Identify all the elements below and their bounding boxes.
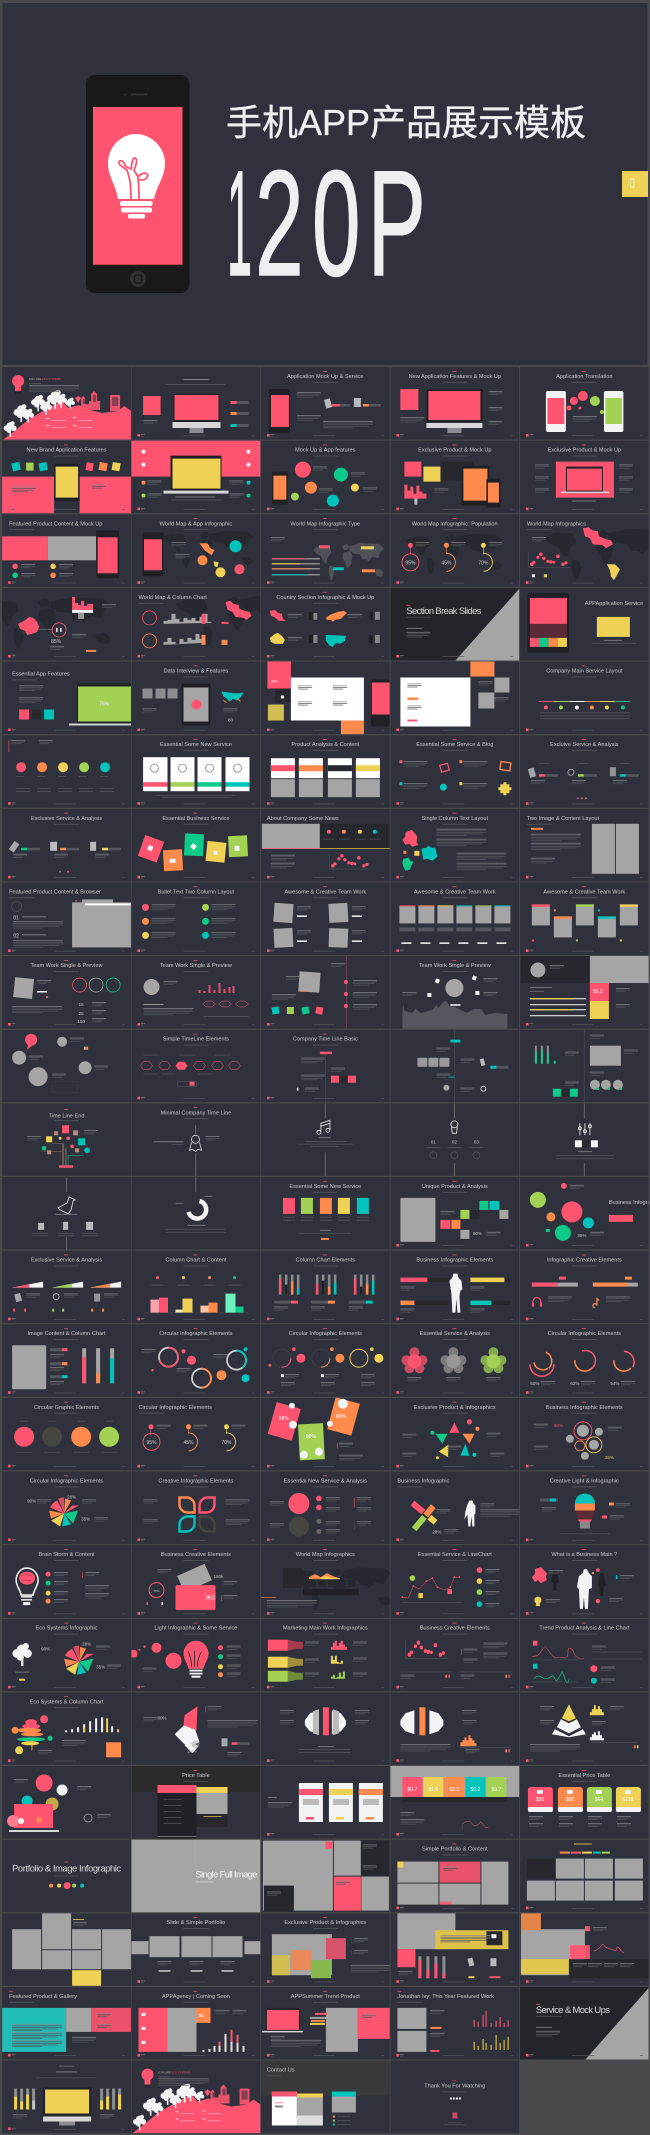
panel: Team Work Profile: 56.2: [593, 989, 603, 995]
panel: Featured Product Content & Browser: 02: [13, 933, 19, 939]
panel: price colored cards: $2.5: [450, 1787, 459, 1793]
panel: World Map & App Infographic: [132, 514, 260, 587]
panel: Creative Light & Infographic: [520, 1472, 649, 1544]
panel: Section Break Slides: [390, 588, 520, 660]
title: Data Interview & Features: [164, 668, 228, 674]
title: Eco Systems & Column Chart: [30, 1699, 104, 1705]
title: Contact Us: [267, 2068, 295, 2074]
panel: Eco Systems Infographic: [2, 1619, 131, 1692]
panel: Business Creative Elements wallet: 150k: [214, 1574, 224, 1579]
title: World Map Infographics: [296, 1552, 355, 1558]
panel: Portfolio & Image Infographic: [2, 1840, 131, 1913]
title: Circular Infographic Elements: [548, 1331, 621, 1337]
panel: APPAgency | Coming Soon: [132, 1987, 260, 2060]
panel: APPSummer Trend Product: [261, 1987, 390, 2060]
title: Simple Portfolio & Content: [422, 1847, 488, 1853]
title: Exclusive Service & Analysis: [31, 1258, 102, 1264]
panel: Business Infographic circles: 35%: [577, 1233, 586, 1238]
panel: Business Creative Elements wallet: [132, 1545, 260, 1618]
silhouette: [464, 1500, 475, 1526]
panel: Column Chart Elements: [261, 1251, 390, 1324]
title: Team Work Single & Preview: [160, 963, 233, 969]
panel: white content sheet: [390, 662, 520, 734]
panel: white shape orange center: [390, 1692, 519, 1765]
panel: APPApplication Service: [520, 588, 649, 660]
panel: fan chart: 20%: [188, 1748, 197, 1753]
title: Slide & Simple Portfolio: [167, 1920, 225, 1926]
panel: World Map Infographic: Population: [390, 514, 520, 587]
panel: World Map Infographics: [520, 514, 649, 587]
panel: Essential Service & Analysis: [390, 1324, 519, 1397]
panel: china map: 85%: [51, 639, 62, 645]
title: Exclusive Product & Mock Up: [418, 448, 491, 454]
title: Business Infographic Elements: [416, 1258, 493, 1264]
panel: Two Image & Content Layout: [520, 809, 649, 882]
panel: Simple Portfolio & Content: [390, 1840, 519, 1913]
panel: Thank You For Watching: [390, 2060, 519, 2134]
title: APPApplication Service: [585, 601, 643, 607]
panel: Slide & Simple Portfolio: [132, 1913, 260, 1986]
title: Time Line End: [49, 1113, 84, 1119]
title: Thank You For Watching: [424, 2084, 485, 2090]
panel: Circular Infographic Elements 4: 95%: [146, 1440, 157, 1446]
heading: 120P: 1: [227, 141, 252, 308]
panel: bulb timeline: 01: [431, 1139, 436, 1144]
panel: price colored cards: $6.2: [471, 1787, 480, 1793]
icon: bulb with brain: [16, 1568, 38, 1605]
grey triangle: [455, 589, 519, 660]
title: New Application Features & Mock Up: [409, 374, 501, 380]
title: Price Table: [182, 1773, 210, 1779]
title: Product Analysis & Content: [291, 742, 360, 748]
panel: Business Infographic Elements rings: 90%: [554, 1423, 563, 1428]
title: Marketing Main Work Infographics: [283, 1626, 368, 1632]
grey triangle: [585, 1988, 649, 2060]
panel: Circular Infographic Elements pie: 28%: [67, 1494, 76, 1500]
panel: Essential Price Table: $56: [536, 1797, 544, 1803]
title: World Map Infographics: [527, 521, 586, 527]
panel: Essential Price Table: $68: [566, 1797, 574, 1803]
panel: timeline chart: [520, 1030, 649, 1103]
panel: Essential Some New Service cards: [261, 1177, 390, 1250]
heading: Section Break Slides: [406, 605, 482, 616]
panel: eco systems end: [132, 2060, 260, 2134]
panel: Company Main Service Layout: [520, 662, 649, 734]
icon: sliders: [578, 1123, 591, 1135]
panel: Circular Infographic Elements 3: [520, 1324, 649, 1397]
title: Column Chart & Content: [165, 1258, 227, 1264]
panel: infographics monitor: [132, 367, 260, 440]
title: Exclusive Product & Infographics: [284, 1920, 366, 1926]
title: What is a Business Main ?: [551, 1552, 617, 1558]
title: Team Work Single & Preview: [30, 963, 103, 969]
panel: Team Work Single & Preview 1: 25: [79, 1011, 84, 1016]
panel: pyramid: [520, 1692, 649, 1765]
title: New Brand Application Features: [27, 448, 107, 454]
crescent chart: [188, 1201, 206, 1219]
panel: Time Line End: [2, 1103, 131, 1176]
panel: Creative Portfolio mosaic: [2, 1913, 131, 1986]
title: Simple TimeLine Elements: [163, 1037, 229, 1043]
panel: Unique Product & Analysis: 90%: [473, 1231, 482, 1236]
panel: price colored cards: $1.5: [429, 1787, 438, 1793]
title: Awesome & Creative Team Work: [543, 889, 625, 895]
panel: Product Analysis & Content: [261, 735, 390, 808]
panel: Featured Product Content & Browser: [2, 882, 131, 955]
title: Essential New Service & Analysis: [284, 1478, 367, 1484]
title: Company Main Service Layout: [546, 668, 623, 674]
panel: Exclusive Service & Analysis wedges: [2, 1251, 131, 1324]
panel: Team Work Single & Preview 1: [2, 956, 131, 1029]
panel: crescent timeline: [132, 1177, 260, 1250]
title: Essential Some New Service: [160, 742, 232, 748]
panel: Circular Infographic Elements 4: [132, 1398, 260, 1471]
panel: Featured Product & Gallery: [2, 1987, 131, 2060]
panel: Exclusive Product & Infographics grid: [261, 1913, 396, 1986]
panel: Team Work Single & Preview 3: [261, 956, 390, 1029]
title: Exclusive Product & Mock Up: [548, 448, 621, 454]
panel: Minimal Company Time Line: [132, 1103, 260, 1176]
panel: Circular Infographic Elements pie: 35%: [81, 1516, 90, 1522]
panel: bulb timeline: [390, 1103, 519, 1176]
title: Circular Infographic Elements: [30, 1478, 103, 1484]
panel: Single Column Text Layout: [390, 809, 520, 882]
title: Mock Up & App features: [295, 448, 356, 454]
panel: Application Mock Up & Service: [261, 367, 390, 440]
heading: 120P: 20P: [255, 139, 426, 307]
panel: Infographic Creative Elements: [520, 1251, 649, 1324]
panel: Awesome & Creative Team Work 2: [390, 882, 520, 955]
heading: Portfolio & Image Infographic: [12, 1863, 121, 1874]
panel: Country Section Infographic & Mock Up: [261, 588, 390, 660]
skyline: [402, 1001, 507, 1034]
panel: Brain Storm & Content: [2, 1545, 131, 1618]
panel: three tilted cards: 80%: [336, 1414, 346, 1420]
title: Essential Some Service & Blog: [416, 742, 493, 748]
title: APPSummer Trend Product: [291, 1994, 360, 2000]
panel: Essential Price Table: $64: [595, 1797, 603, 1803]
title: Essential Service & LineChart: [418, 1552, 492, 1558]
title: Essential App Features: [12, 672, 70, 678]
panel: Featured Product Content & Browser: 01: [13, 915, 19, 921]
panel: Circular Infographic Elements 4: 45%: [183, 1440, 194, 1446]
panel: sliders timeline: [520, 1103, 649, 1176]
panel: Service & Mock Ups: [520, 1987, 649, 2060]
panel: Essential Some New Service: [132, 735, 260, 808]
title: Circular Graphic Elements: [34, 1405, 99, 1411]
panel: flask timeline: [2, 1177, 131, 1250]
panel: Essential Some Service & Blog: [390, 735, 520, 808]
title: Excluive Service & Analysis: [550, 742, 619, 748]
panel: price cards white: [261, 1766, 390, 1839]
panel: Exclusive Product & Mock Up: [390, 440, 520, 514]
panel: cover slide: [2, 3, 648, 365]
title: Column Chart Elements: [296, 1258, 355, 1264]
panel: Company Time Line Basic: [261, 1030, 390, 1103]
panel: portfolio mosaic 1: [261, 1840, 390, 1913]
panel: Eco Systems Infographic: 35%: [96, 1665, 105, 1670]
title: Company Time Line Basic: [293, 1037, 358, 1043]
title: chinese heading: 手机APP产品展示模板: [226, 102, 586, 143]
title: Country Section Infographic & Mock Up: [276, 595, 374, 601]
panel: Essential Price Table: $118: [623, 1797, 633, 1803]
panel: monitor with side bars: [2, 2060, 131, 2134]
title: Awesome & Creative Team Work: [414, 889, 496, 895]
title: Trend Product Analysis & Line Chart: [539, 1626, 630, 1632]
panel: orange and line: [520, 1913, 649, 1986]
panel: Circular Infographic Elements 3: 54%: [610, 1381, 619, 1386]
colored tree: [12, 1715, 53, 1754]
panel: Team Work Single & Preview 1: 15: [79, 1002, 84, 1007]
panel: Creative Portfolio grid: [520, 1840, 649, 1913]
panel: Business Infographic circles: [520, 1177, 650, 1250]
title: Minimal Company Time Line: [161, 1110, 231, 1116]
panel: red band laptop: [132, 440, 260, 514]
panel: Image Content & Column Chart: [2, 1324, 131, 1397]
yellow tab: [622, 171, 648, 197]
panel: Data Interview & Features: [132, 662, 260, 734]
title: World Map & Column Chart: [138, 595, 207, 601]
title: Featured Product Content & Mock Up: [9, 521, 102, 527]
title: Application Translation: [556, 374, 612, 380]
panel: fan chart: [132, 1692, 260, 1765]
panel: china map: [2, 588, 131, 660]
title: Essential Some New Service: [289, 1184, 361, 1190]
monitor: [172, 394, 220, 433]
title: Bullet Text Two Column Layout: [158, 889, 235, 895]
title: Exclusive Product & Infographics: [414, 1405, 496, 1411]
panel: Excluive Service & Analysis: [520, 735, 649, 808]
title: About Company Some News: [267, 816, 339, 822]
tablet: [527, 593, 569, 653]
title: Light Infographic & Some Service: [154, 1626, 237, 1632]
panel: Essential Price Table: [520, 1766, 649, 1839]
title: Essential Service & Analysis: [420, 1331, 490, 1337]
icon: music note: [317, 1120, 330, 1134]
panel: price colored cards: $0.7: [408, 1787, 417, 1793]
panel: Essential App Features: 75%: [99, 702, 110, 708]
panel: Exclusive Service & Analysis: [2, 809, 131, 882]
panel: Eco Systems & Column Chart: [2, 1692, 131, 1765]
title: Essential Price Table: [558, 1773, 610, 1779]
illustration: hill city: [3, 375, 131, 440]
panel: What is a Business Main ?: [520, 1545, 649, 1618]
panel: New Brand Application Features: [2, 440, 131, 514]
title: Creative Light & Infographic: [550, 1478, 619, 1484]
title: Business Creative Elements: [161, 1552, 231, 1558]
panel: Circular Infographic Elements 4: 70%: [221, 1440, 232, 1446]
panel: Featured Product Content & Mock Up: [2, 514, 131, 587]
panel: Essential New Service & Analysis: [261, 1472, 390, 1544]
title: World Map & App Infographic: [160, 521, 232, 527]
panel: Essential Service & LineChart: [390, 1545, 519, 1618]
tree of squares: [42, 1125, 90, 1168]
panel: Business Infographic Elements rings: [520, 1398, 649, 1471]
panel: Application Translation: [520, 367, 649, 440]
panel: World Map Infographic: Population: 45%: [441, 560, 452, 566]
panel: Business Infographic: [390, 1472, 530, 1544]
panel: Creative Infographic Elements: [132, 1472, 260, 1544]
silhouette: [449, 1274, 462, 1313]
panel: World Map & Column Chart: [132, 588, 260, 660]
panel: Exclusive Product & Mock Up laptop: [520, 440, 649, 514]
panel: Jonathan Ivy: This Year Featured Work: [390, 1987, 519, 2060]
title: Circular Infographic Elements: [289, 1331, 362, 1337]
panel: Unique Product & Analysis: [390, 1177, 519, 1250]
panel: APPAgency | Coming Soon: 36: [198, 2013, 204, 2018]
title: Team Work Single & Preview: [419, 963, 492, 969]
panel: World Map Infographic: Population: 95%: [405, 560, 416, 566]
panel: bulb timeline: 02: [452, 1139, 457, 1144]
panel: three tilted cards: [261, 1397, 390, 1471]
title: Jonathan Ivy: This Year Featured Work: [397, 1994, 494, 2000]
panel: yellow banner bars: [390, 1913, 519, 1986]
icon: bulb: [451, 1121, 458, 1133]
panel: New Application Features & Mock Up: [390, 367, 520, 440]
title: Featured Product & Gallery: [9, 1994, 77, 2000]
panel: Eco Systems Infographic: 28%: [82, 1642, 91, 1647]
panel: Column Chart & Content: [132, 1251, 260, 1324]
icon: flask: [58, 1197, 75, 1214]
panel: Bullet Text Two Column Layout: [132, 882, 260, 955]
panel: Business Creative Elements scatter: [390, 1619, 519, 1692]
panel: timeline teal: [390, 1030, 519, 1103]
illustration: hill city: [132, 2068, 260, 2133]
title: Infographic Creative Elements: [547, 1258, 622, 1264]
panel: Circular Graphic Elements: [2, 1398, 131, 1471]
panel: Team Work Single & Preview 2: [132, 956, 260, 1029]
title: Eco Systems Infographic: [36, 1626, 98, 1632]
panel: three tilted cards: 80%: [306, 1434, 316, 1440]
panel: Circular Infographic Elements 2: [261, 1324, 390, 1397]
panel: Simple TimeLine Elements: [132, 1030, 260, 1103]
panel: Welcome white page: [261, 662, 390, 734]
panel: World Map Infographic: Population: 70%: [478, 560, 489, 566]
panel: Team Work Single & Preview 1: 150: [77, 1019, 85, 1024]
icon: phone with lightbulb: [86, 75, 190, 293]
panel: Circular Infographic Elements 1: [132, 1324, 260, 1397]
panel: Exclusive Product & Infographics: [390, 1398, 519, 1471]
panel: five colored circles: [2, 735, 131, 808]
title: World Map Infographic: Population: [412, 521, 498, 527]
panel: Business Infographic: 28%: [432, 1530, 441, 1534]
panel: fan chart: 80%: [158, 1715, 167, 1720]
panel: Circular Infographic Elements 3: 50%: [530, 1381, 539, 1386]
panel: Team Work Single & Preview 4: [390, 956, 519, 1034]
title: Creative Infographic Elements: [158, 1478, 234, 1484]
title: Business Infographic: [397, 1478, 450, 1484]
panel: World Map Infographics area chart: [261, 1545, 392, 1618]
panel: Essential Business Service: [132, 809, 260, 882]
panel: team circles: [2, 1030, 131, 1103]
laptop: [164, 456, 228, 494]
panel: Circular Infographic Elements pie: [2, 1472, 131, 1544]
panel: Awesome & Creative Team Work 3: [520, 882, 649, 955]
panel: World Map Infographic Type: [261, 514, 390, 587]
panel: Mock Up & App features: [261, 440, 390, 514]
title: Exclusive Service & Analysis: [31, 816, 102, 822]
panel: slide eco systems: [2, 367, 131, 440]
title: Business Creative Elements: [420, 1626, 490, 1632]
panel: Single Full Image: [132, 1840, 260, 1913]
title: APPAgency | Coming Soon: [162, 1994, 230, 2000]
title: Two Image & Content Layout: [527, 816, 599, 822]
panel: Welcome white page: Wol: [271, 678, 278, 684]
title: Single Column Text Layout: [422, 816, 488, 822]
title: Circular Infographic Elements: [138, 1405, 212, 1411]
heading: Single Full Image: [196, 1869, 258, 1880]
panel: price colored cards: [390, 1766, 519, 1839]
panel: Awesome & Creative Team Work 1: [261, 882, 390, 955]
panel: About Company Some News: [261, 809, 390, 882]
panel: bulb timeline: 03: [474, 1139, 479, 1144]
panel: Business Creative Elements wallet: 75%: [153, 1589, 160, 1593]
panel: Circular Infographic Elements pie: 90%: [27, 1498, 36, 1504]
panel: music timeline: [261, 1103, 390, 1176]
panel: Marketing Main Work Infographics: [261, 1619, 390, 1692]
panel: Business Infographic Elements rings: 35%: [605, 1455, 614, 1460]
panel: laptop circles: [2, 1766, 131, 1839]
title: Circular Infographic Elements: [159, 1331, 233, 1337]
panel: Trend Product Analysis & Line Chart: [520, 1619, 649, 1692]
title: Image Content & Column Chart: [27, 1331, 106, 1337]
panel: Team Work Profile: [520, 956, 649, 1029]
panel: Price Table: [132, 1766, 260, 1839]
panel: Eco Systems Infographic: 90%: [41, 1647, 50, 1652]
panel: white shape red center: [261, 1692, 390, 1765]
title: World Map Infographic Type: [290, 521, 360, 527]
title: Awesome & Creative Team Work: [284, 889, 366, 895]
title: Business Infographic Elements: [546, 1405, 623, 1411]
panel: Light Infographic & Some Service: [130, 1619, 260, 1692]
title: Application Mock Up & Service: [287, 374, 364, 380]
panel: Data Interview & Features: 80: [228, 718, 233, 722]
title: Featured Product Content & Browser: [9, 889, 101, 895]
panel: Essential App Features: [2, 662, 131, 734]
panel: three tilted cards: 58%: [279, 1416, 289, 1422]
panel: Contact Us: [261, 2060, 390, 2134]
heading: Service & Mock Ups: [536, 2004, 610, 2015]
panel: price colored cards: $9.7: [492, 1787, 501, 1793]
title: Essential Business Service: [162, 816, 229, 822]
title: Brain Storm & Content: [39, 1552, 95, 1558]
title: Unique Product & Analysis: [422, 1184, 488, 1190]
panel: Circular Infographic Elements 3: 62%: [570, 1381, 579, 1386]
panel: Business Infographic Elements: [390, 1251, 519, 1324]
